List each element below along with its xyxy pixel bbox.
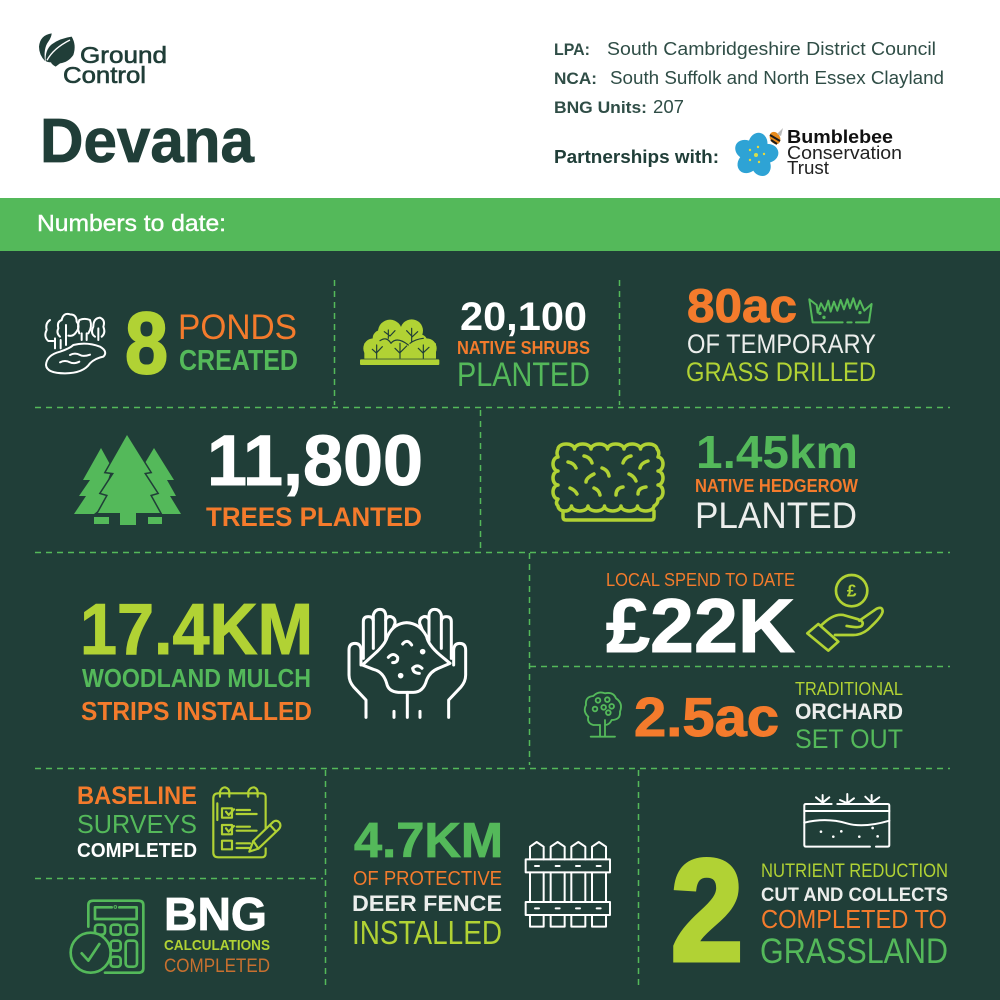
- label: native shrubs planted: PLANTED: [457, 356, 590, 394]
- partnerships label: Partnerships with:: [554, 147, 719, 167]
- label: local spend to date: LOCAL SPEND TO DATE: [606, 570, 795, 590]
- icon: grass: [809, 298, 872, 322]
- label: trees planted: TREES PLANTED: [206, 502, 422, 532]
- title: Devana: [40, 107, 254, 176]
- panel: BNG calculations: [71, 888, 270, 977]
- label: traditional orchard set out: TRADITIONAL: [795, 679, 903, 699]
- label: protective deer fence installed: INSTALLED: [352, 914, 502, 951]
- label: protective deer fence installed: [352, 868, 502, 951]
- label: traditional orchard set out: ORCHARD: [795, 699, 903, 724]
- label: protective deer fence installed: DEER FENCE: [352, 891, 502, 916]
- logo: Bumblebee Conservation Trust: Trust: [787, 158, 829, 178]
- label: woodland mulch strips installed: STRIPS INSTALLED: [81, 696, 312, 726]
- icon: hands holding soil: [349, 609, 466, 717]
- label: traditional orchard set out: [795, 679, 903, 754]
- label: native shrubs planted: NATIVE SHRUBS: [457, 338, 590, 358]
- logo: Bumblebee Conservation Trust: [732, 127, 902, 179]
- logo: Bumblebee Conservation Trust: Bumblebee: [787, 127, 893, 147]
- project details: [554, 39, 944, 117]
- label: nutrient reduction text: GRASSLAND: [760, 932, 948, 971]
- logo: Bumblebee Conservation Trust: Conservation: [787, 143, 902, 163]
- stat: 17.4KM: 17.4KM: [80, 590, 313, 670]
- label: ponds created: CREATED: [179, 345, 298, 377]
- project details: South Suffolk and North Essex Clayland: [610, 68, 944, 88]
- project details: 207: [653, 97, 684, 117]
- panel: hedgerow: [553, 426, 858, 536]
- label: native shrubs planted: [457, 338, 590, 394]
- icon: hand with coin: [807, 575, 883, 651]
- panel: woodland mulch: [80, 590, 466, 726]
- label: calculations completed: CALCULATIONS: [164, 937, 270, 954]
- stat: 20,100: 20,100: [460, 295, 587, 339]
- label: calculations completed: [164, 937, 270, 977]
- label: nutrient reduction text: CUT AND COLLECTS: [761, 885, 948, 906]
- label: temporary grass drilled: GRASS DRILLED: [686, 357, 876, 387]
- project details: South Cambridgeshire District Council: [607, 39, 936, 59]
- label: calculations completed: COMPLETED: [164, 956, 270, 977]
- panel: local spend: [606, 570, 883, 669]
- label: protective deer fence installed: OF PROTECTIVE: [353, 868, 502, 890]
- icon: shrubs: [360, 319, 439, 365]
- label: woodland mulch strips installed: [81, 663, 312, 726]
- icon: hedge: [553, 444, 663, 520]
- logo: Ground Control: Control: [63, 62, 146, 88]
- label: temporary grass drilled: OF TEMPORARY: [687, 329, 876, 359]
- label: ponds created: [178, 308, 298, 377]
- panel: ponds: [45, 295, 298, 392]
- label: baseline surveys completed: SURVEYS: [77, 809, 197, 839]
- label: nutrient reduction text: [760, 861, 948, 971]
- stat: 2.5ac: 2.5ac: [634, 686, 779, 748]
- label: temporary grass drilled: [686, 329, 876, 387]
- project details: LPA:: [554, 40, 590, 59]
- panel: deer fence: [352, 814, 610, 951]
- panel: trees: [74, 422, 423, 532]
- dark background panel: [0, 251, 1000, 1000]
- label: baseline surveys completed: [77, 782, 197, 862]
- label: nutrient reduction text: NUTRIENT REDUCTION: [761, 861, 948, 882]
- stat: 11,800: 11,800: [207, 422, 423, 501]
- label: baseline surveys completed: BASELINE: [77, 782, 197, 810]
- header band: numbers to date: [0, 198, 1000, 251]
- panel: baseline surveys: [77, 782, 280, 862]
- stat: 1.45km: 1.45km: [696, 426, 858, 478]
- icon: clipboard: [213, 787, 280, 857]
- icon: trees: [74, 435, 181, 525]
- label: native hedgerow planted: PLANTED: [695, 495, 857, 536]
- icon: hand with coin: £: [847, 581, 857, 601]
- label: ponds created: PONDS: [178, 308, 297, 347]
- stat: BNG: BNG: [164, 888, 267, 940]
- logo: Ground Control: Ground: [80, 42, 167, 68]
- panel: shrubs: [360, 295, 590, 394]
- panel: orchard: [585, 679, 903, 754]
- panel: nutrient reduction: [671, 794, 948, 991]
- stat: 2: 2: [671, 830, 743, 991]
- logo: Ground Control: [39, 33, 167, 88]
- stat: 80ac: 80ac: [687, 279, 797, 332]
- icon: orchard tree: [585, 692, 621, 737]
- label: nutrient reduction text: COMPLETED TO: [761, 904, 947, 934]
- project details: NCA:: [554, 69, 597, 88]
- icon: soil cross-section: [804, 794, 889, 847]
- icon: fence: [526, 842, 610, 927]
- stat: 4.7KM: 4.7KM: [354, 814, 503, 868]
- label: native hedgerow planted: [695, 476, 858, 536]
- panel: temporary grass: [686, 279, 876, 387]
- icon: calculator with tick: [71, 901, 143, 973]
- label: traditional orchard set out: SET OUT: [795, 724, 903, 754]
- label: woodland mulch strips installed: WOODLAND MULCH: [82, 663, 311, 693]
- label: baseline surveys completed: COMPLETED: [77, 840, 197, 862]
- stat: 8: 8: [125, 295, 168, 392]
- stat: £22K: £22K: [606, 584, 795, 669]
- icon: pond and trees: [45, 314, 105, 373]
- header band: numbers to date: Numbers to date:: [37, 210, 226, 236]
- label: native hedgerow planted: NATIVE HEDGEROW: [695, 476, 858, 496]
- project details: BNG Units:: [554, 98, 647, 117]
